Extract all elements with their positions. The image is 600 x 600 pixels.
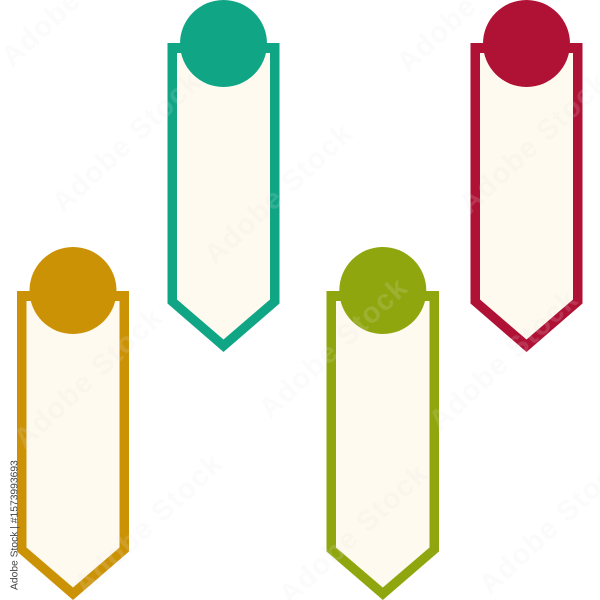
banner: olive green bbox=[326, 247, 439, 600]
watermark pattern: Adobe Stock bbox=[198, 118, 359, 271]
stock credit text: Adobe Stock | #1573993693 bbox=[10, 460, 20, 590]
banner: teal bbox=[168, 0, 280, 352]
banner: crimson bbox=[470, 0, 582, 352]
amber circle bbox=[30, 247, 116, 334]
teal banner panel bbox=[177, 53, 270, 340]
watermark pattern: Adobe Stock bbox=[46, 66, 207, 219]
crimson circle bbox=[483, 0, 570, 87]
crimson banner outline bbox=[470, 43, 582, 352]
green banner outline bbox=[326, 291, 439, 600]
watermark pattern: Adobe Stock bbox=[253, 272, 414, 425]
amber banner panel bbox=[26, 301, 120, 588]
crimson banner panel bbox=[480, 53, 573, 340]
green banner panel bbox=[336, 301, 430, 588]
banner: amber bbox=[17, 247, 129, 600]
amber banner outline bbox=[17, 291, 129, 600]
watermark pattern: Adobe Stock bbox=[8, 302, 169, 455]
teal circle bbox=[180, 0, 267, 87]
watermark pattern: Adobe Stock bbox=[423, 284, 584, 437]
teal banner outline bbox=[168, 43, 280, 352]
green circle bbox=[339, 247, 426, 334]
watermark pattern: Adobe Stock bbox=[68, 448, 229, 600]
